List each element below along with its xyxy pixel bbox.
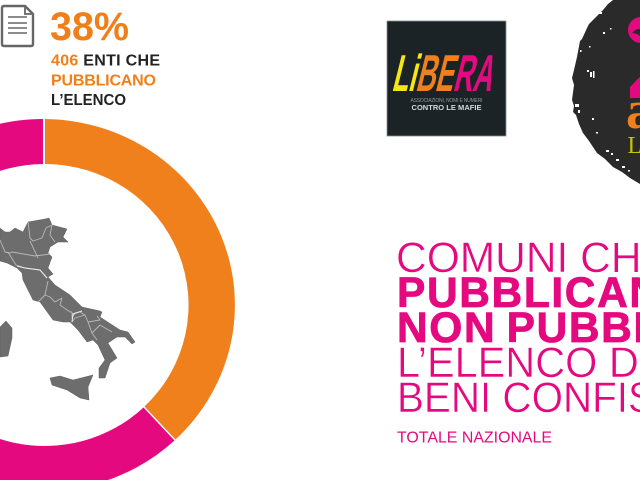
statistic: 38%: 38% <box>50 5 129 49</box>
map: Sicily <box>50 375 93 400</box>
logo tagline: ASSOCIAZIONI, NOMI E NUMERI <box>410 98 482 104</box>
badge numeral notch <box>632 29 640 36</box>
map: Sardinia <box>0 321 12 357</box>
text block: 406 enti che pubblicano l'elenco: L’ELENCO <box>51 92 126 109</box>
logo subtitle: CONTRO LE MAFIE <box>412 103 482 112</box>
map: mainland <box>0 218 135 378</box>
donut segment: pink 62% <box>0 119 175 480</box>
badge speckles <box>575 12 630 172</box>
logo wordmark: LiBERA <box>388 45 503 103</box>
badge background <box>572 0 640 184</box>
logo: Libera <box>387 21 506 136</box>
map: regional borders <box>0 222 112 340</box>
text block: 406 enti che pubblicano l'elenco: PUBBLICANO <box>51 72 156 90</box>
badge numeral top terminal <box>628 17 640 43</box>
icon: document <box>2 6 33 46</box>
donut segment: orange 38% <box>45 119 235 440</box>
donut chart: 38% pubblicano <box>0 119 235 480</box>
map of Italy <box>0 218 135 400</box>
logo background <box>387 21 506 136</box>
badge: anniversary circle <box>572 0 640 184</box>
title <box>396 235 640 421</box>
map: white border accent <box>17 266 82 322</box>
subtitle: totale nazionale: TOTALE NAZIONALE <box>397 430 552 446</box>
text block: 406 enti che pubblicano l'elenco <box>51 52 160 109</box>
text block: 406 enti che pubblicano l'elenco: 406 ENTI CHE <box>51 52 160 70</box>
